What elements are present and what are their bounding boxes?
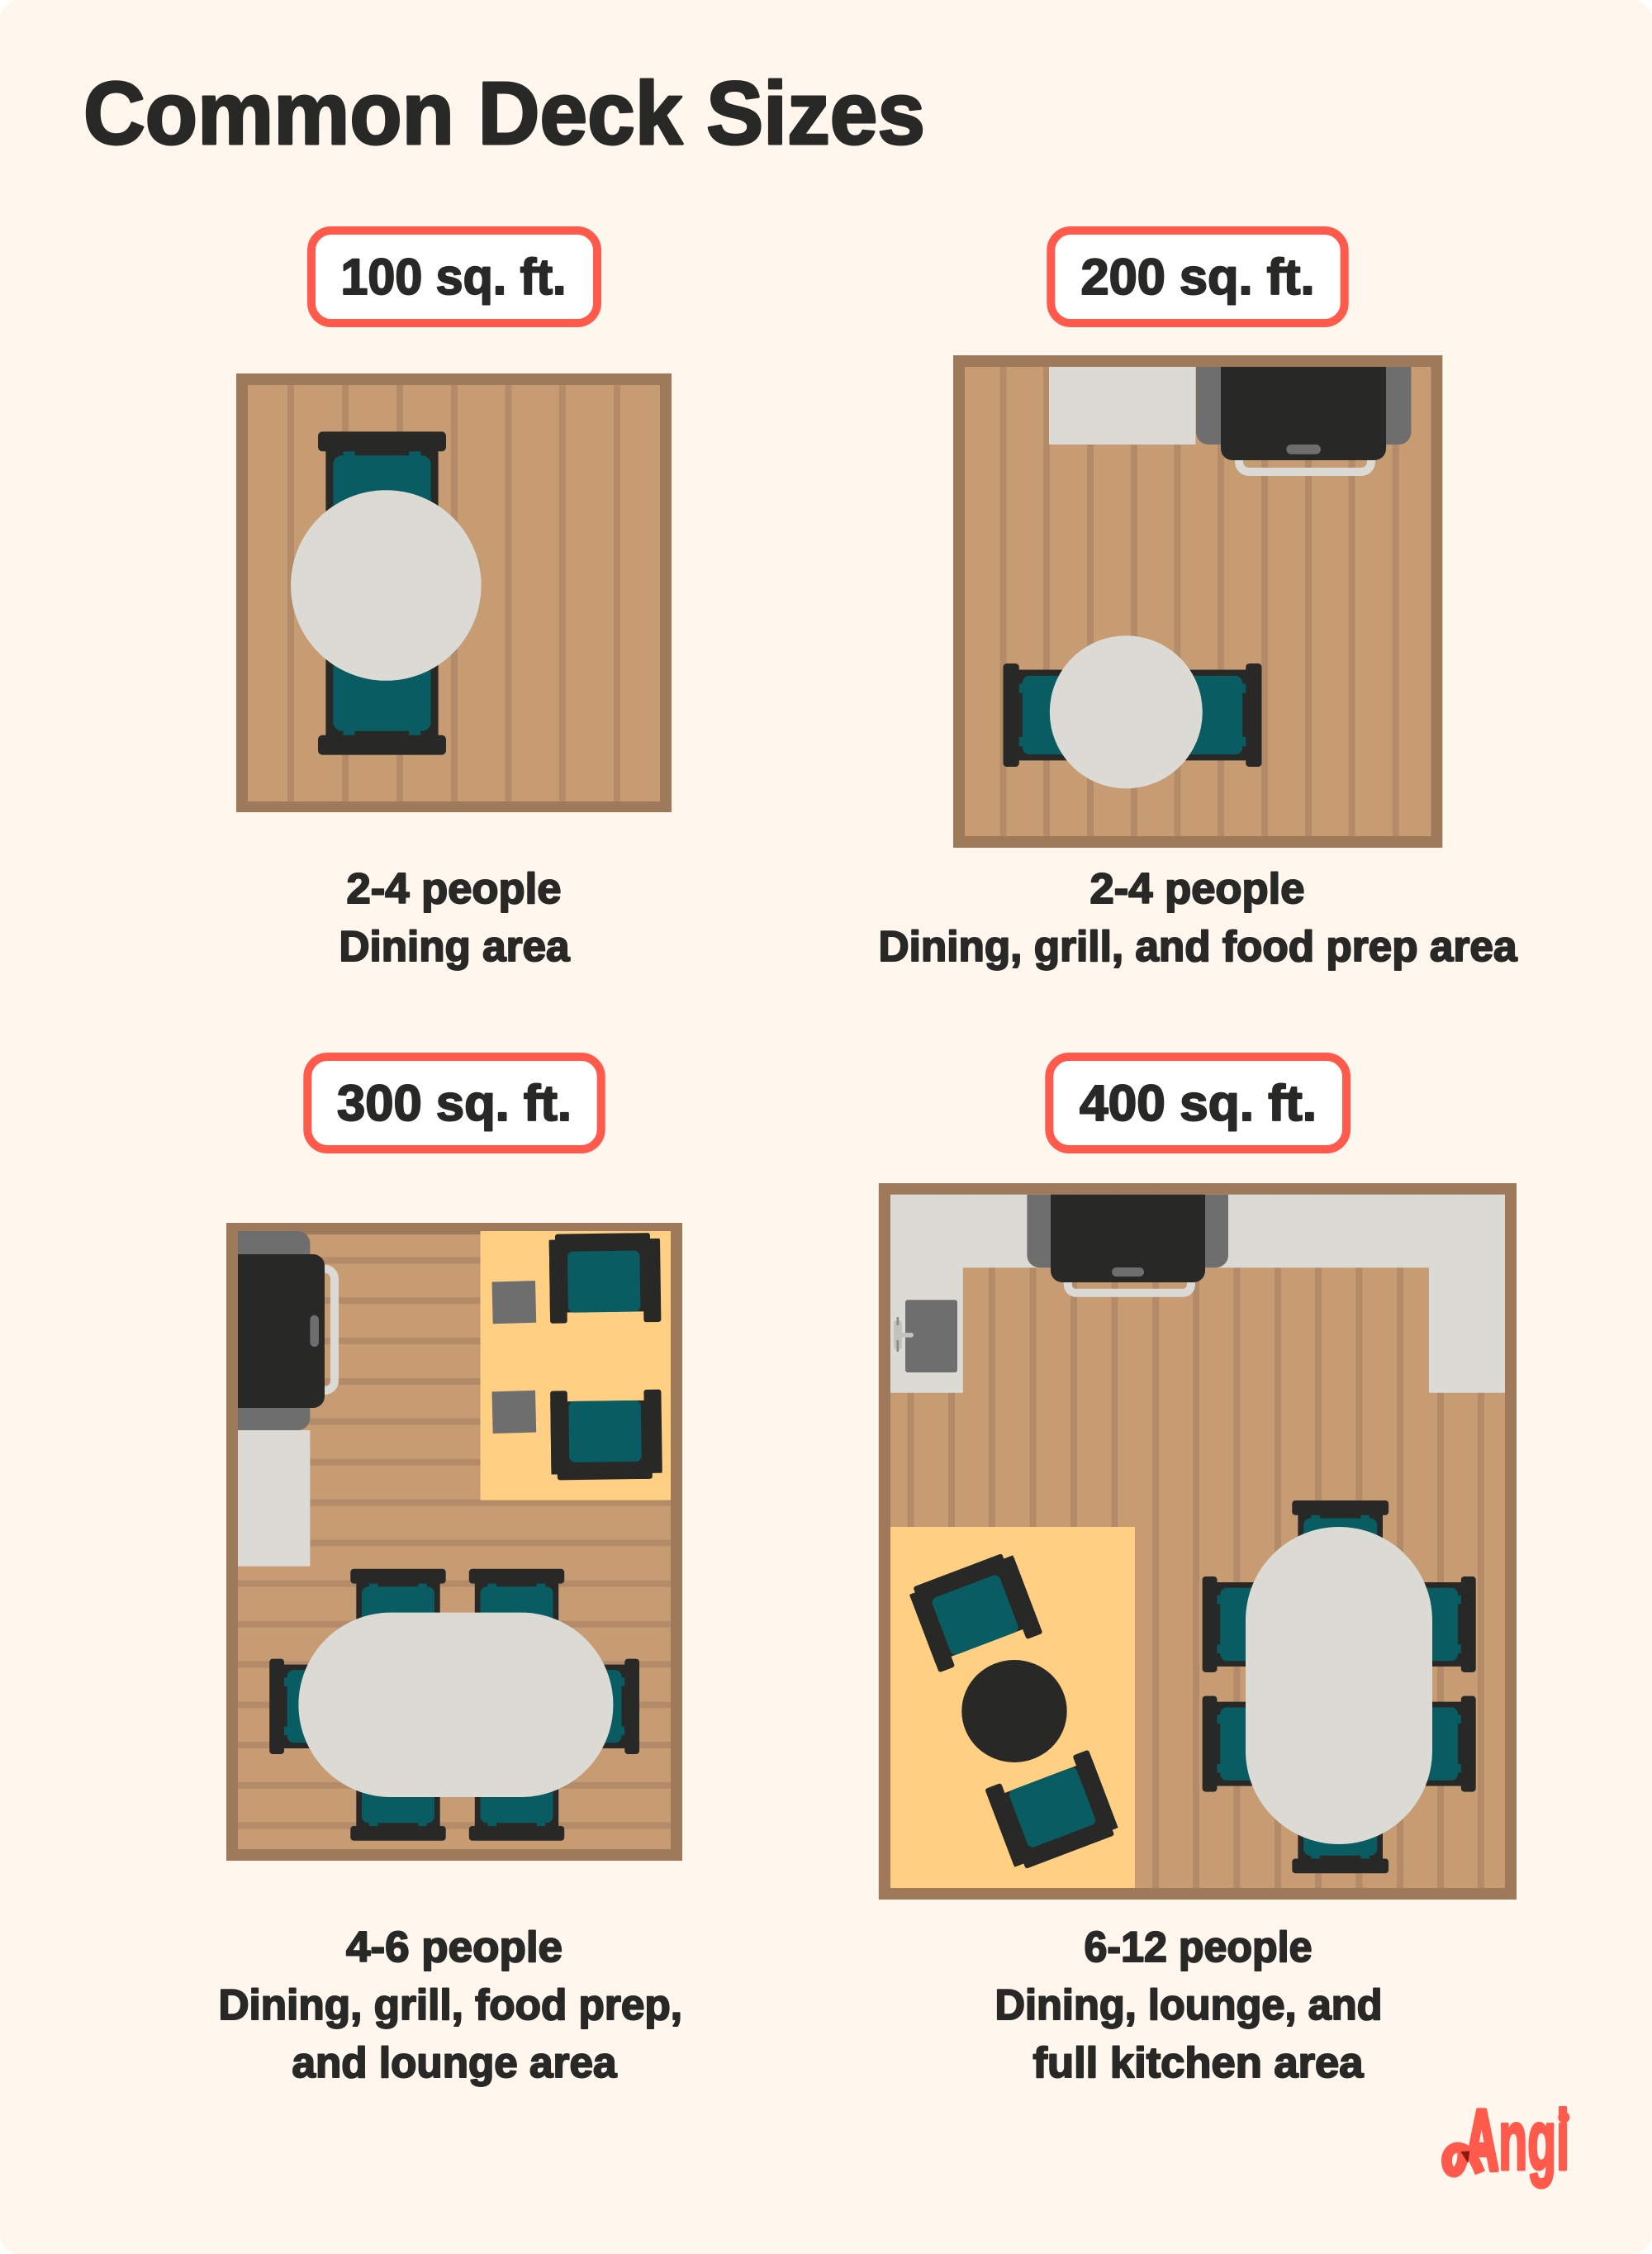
round dining table	[1050, 635, 1203, 788]
panel: 100 sq. ft. deck	[236, 231, 672, 971]
dining chair right end	[563, 1659, 639, 1754]
caption: 200 sq. ft.	[879, 865, 1518, 971]
dining chair top left	[350, 1569, 446, 1645]
dining chair bottom left	[350, 1765, 446, 1841]
grill	[238, 1231, 335, 1430]
oval dining table	[1246, 1527, 1432, 1844]
dining chair top	[318, 431, 446, 534]
caption: 200 sq. ft.: 2-4 people	[1090, 865, 1305, 913]
dining chair right lower	[1399, 1696, 1476, 1792]
label: 300 sq. ft.	[307, 1057, 601, 1149]
caption: 400 sq. ft.	[995, 1924, 1383, 2087]
panel: 200 sq. ft. deck	[879, 231, 1518, 971]
logo: Angi	[1446, 2092, 1569, 2188]
deck floor plan: 400 sq. ft.	[879, 1183, 1517, 1900]
dining chair right upper	[1399, 1576, 1476, 1672]
label: 400 sq. ft.	[1049, 1057, 1346, 1149]
dining chair right	[1180, 663, 1262, 767]
label: 200 sq. ft.	[1051, 231, 1345, 323]
dining chair bottom	[318, 653, 446, 755]
food prep counter	[238, 1430, 310, 1567]
round dining table	[291, 490, 482, 681]
lounge rug	[481, 1231, 671, 1500]
side table bottom	[492, 1391, 536, 1434]
lounge chair bottom	[550, 1390, 662, 1480]
caption: 200 sq. ft.: Dining, grill, and food prep area	[879, 923, 1518, 971]
dining chair left end	[269, 1659, 345, 1754]
caption: 100 sq. ft.	[339, 865, 571, 971]
panel: 300 sq. ft. deck	[218, 1057, 682, 2087]
deck floor plan: 300 sq. ft.	[226, 1223, 682, 1861]
side table top	[492, 1281, 536, 1324]
caption: 400 sq. ft.: Dining, lounge, and	[995, 1981, 1383, 2029]
oval dining table	[298, 1613, 613, 1797]
label: 400 sq. ft.: 400 sq. ft.	[1080, 1075, 1317, 1131]
dining chair top end	[1292, 1500, 1389, 1576]
dining chair bottom right	[469, 1765, 564, 1841]
sink	[894, 1300, 957, 1372]
round coffee table	[961, 1660, 1067, 1762]
logo: Angi: Angi	[1464, 2092, 1569, 2188]
dining chair left lower	[1203, 1696, 1279, 1792]
label: 200 sq. ft.: 200 sq. ft.	[1080, 249, 1315, 305]
title: Common Deck Sizes	[83, 63, 925, 163]
label: 300 sq. ft.: 300 sq. ft.	[337, 1075, 572, 1131]
caption: 300 sq. ft.: 4-6 people	[346, 1924, 563, 1971]
caption: 300 sq. ft.	[218, 1924, 682, 2087]
food prep counter	[1049, 367, 1196, 445]
lounge chair lower	[985, 1750, 1120, 1872]
lounge rug	[890, 1527, 1135, 1888]
caption: 300 sq. ft.: Dining, grill, food prep,	[218, 1981, 682, 2029]
dining chair bottom end	[1292, 1797, 1389, 1873]
caption: 100 sq. ft.: Dining area	[339, 923, 571, 971]
caption: 300 sq. ft.: and lounge area	[292, 2039, 618, 2087]
U-shaped kitchen counter	[890, 1195, 1505, 1393]
deck floor plan: 200 sq. ft.	[953, 355, 1442, 848]
lounge chair top	[549, 1233, 661, 1324]
caption: 100 sq. ft.: 2-4 people	[347, 865, 562, 913]
grill	[1196, 367, 1411, 472]
lounge chair upper	[908, 1550, 1042, 1672]
deck floor plan: 100 sq. ft.	[236, 373, 672, 812]
panel: 400 sq. ft. deck	[879, 1057, 1517, 2087]
dining chair left	[1003, 663, 1085, 767]
caption: 400 sq. ft.: 6-12 people	[1084, 1924, 1312, 1971]
grill	[1027, 1195, 1228, 1293]
caption: 400 sq. ft.: full kitchen area	[1032, 2039, 1365, 2087]
dining chair left upper	[1203, 1576, 1279, 1672]
label: 100 sq. ft.: 100 sq. ft.	[340, 249, 567, 305]
dining chair top right	[469, 1569, 564, 1645]
label: 100 sq. ft.	[311, 231, 597, 323]
